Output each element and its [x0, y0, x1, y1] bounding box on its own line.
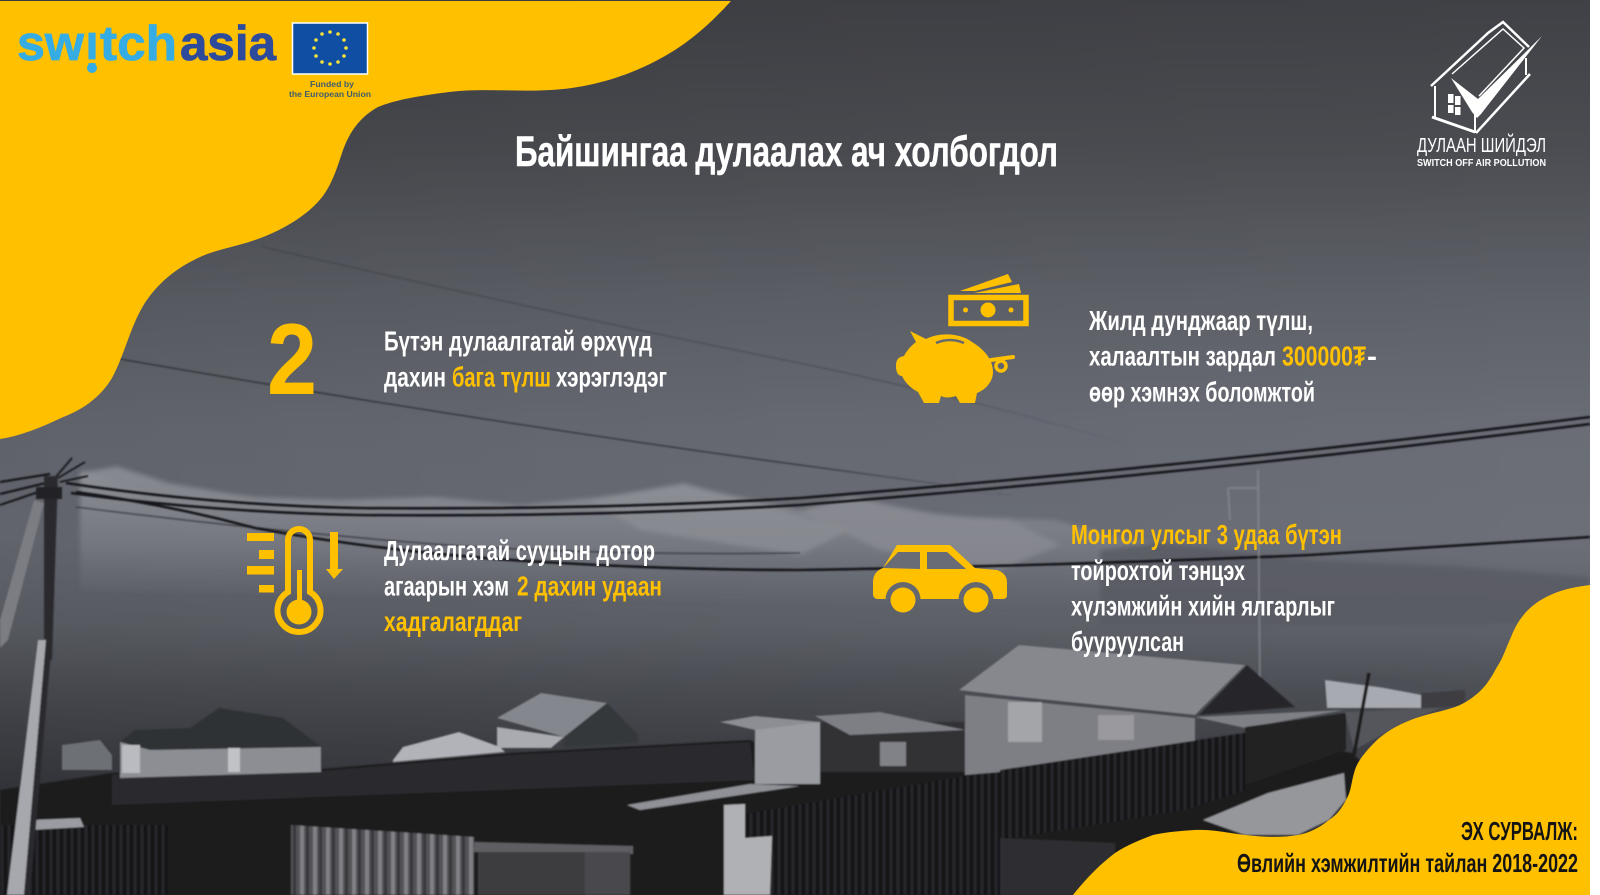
big number 2: 2 [267, 304, 317, 416]
text block: annual fuel cost savings [1088, 305, 1377, 408]
logo: Dulaan Shiidel house with check mark: SWITCH OFF AIR POLLUTION [1417, 157, 1546, 169]
text block: emissions reduced by circling Mongolia three times [1071, 519, 1342, 657]
text block: insulated home holds warmth twice as long: хадгалагддаг [384, 606, 522, 637]
logo: switchasia: i [86, 22, 98, 76]
text block: two times less fuel: дахин [384, 362, 446, 392]
text block: emissions reduced by circling Mongolia three times: бууруулсан [1071, 626, 1184, 657]
text block: annual fuel cost savings: - [1367, 340, 1377, 372]
logo: switchasia [17, 17, 277, 76]
text block: insulated home holds warmth twice as long [384, 535, 662, 637]
caption: funded by the European Union: the European Union [289, 89, 371, 99]
text block: two times less fuel: хэрэглэдэг [556, 362, 667, 392]
text block: two times less fuel: бага түлш [452, 362, 551, 392]
icon: piggy bank with money [896, 274, 1026, 403]
text block: insulated home holds warmth twice as long: Дулаалгатай сууцын дотор [384, 535, 655, 566]
text block: insulated home holds warmth twice as long: 2 дахин удаан [517, 570, 662, 602]
text block: two times less fuel: Бүтэн дулаалгатай өрхүүд [384, 326, 652, 356]
logo: switchasia: tch [100, 17, 177, 71]
yellow blob: top left [0, 1, 731, 439]
yellow blob: bottom right [1073, 585, 1590, 895]
logo: Dulaan Shiidel house with check mark [1417, 22, 1546, 169]
text block: two times less fuel [384, 326, 667, 392]
text block: annual fuel cost savings: халаалтын зардал [1089, 340, 1276, 372]
title: Байшингаа дулаалах ач холбогдол [515, 128, 1058, 176]
logo: Dulaan Shiidel house with check mark: ДУЛААН ШИЙДЭЛ [1417, 133, 1546, 157]
icon: car [873, 545, 1007, 612]
logo: switchasia: sw [17, 17, 85, 71]
text block: annual fuel cost savings: Жилд дунджаар түлш, [1088, 305, 1313, 336]
caption: funded by the European Union [289, 79, 371, 99]
text block: emissions reduced by circling Mongolia three times: хүлэмжийн хийн ялгарлыг [1071, 590, 1335, 622]
icon: thermometer with falling temperature [247, 529, 343, 632]
text block: insulated home holds warmth twice as long: агаарын хэм [384, 570, 509, 602]
text block: emissions reduced by circling Mongolia three times: Монгол улсыг 3 удаа бүтэн [1071, 519, 1342, 550]
source note [1237, 816, 1578, 878]
text block: annual fuel cost savings: 300000₮ [1282, 340, 1366, 372]
text block: annual fuel cost savings: өөр хэмнэх боломжтой [1089, 376, 1315, 408]
caption: funded by the European Union: Funded by [310, 79, 354, 89]
logo: EU flag [292, 23, 368, 74]
text block: emissions reduced by circling Mongolia three times: тойрохтой тэнцэх [1071, 555, 1245, 586]
logo: switchasia: asia [180, 17, 277, 71]
